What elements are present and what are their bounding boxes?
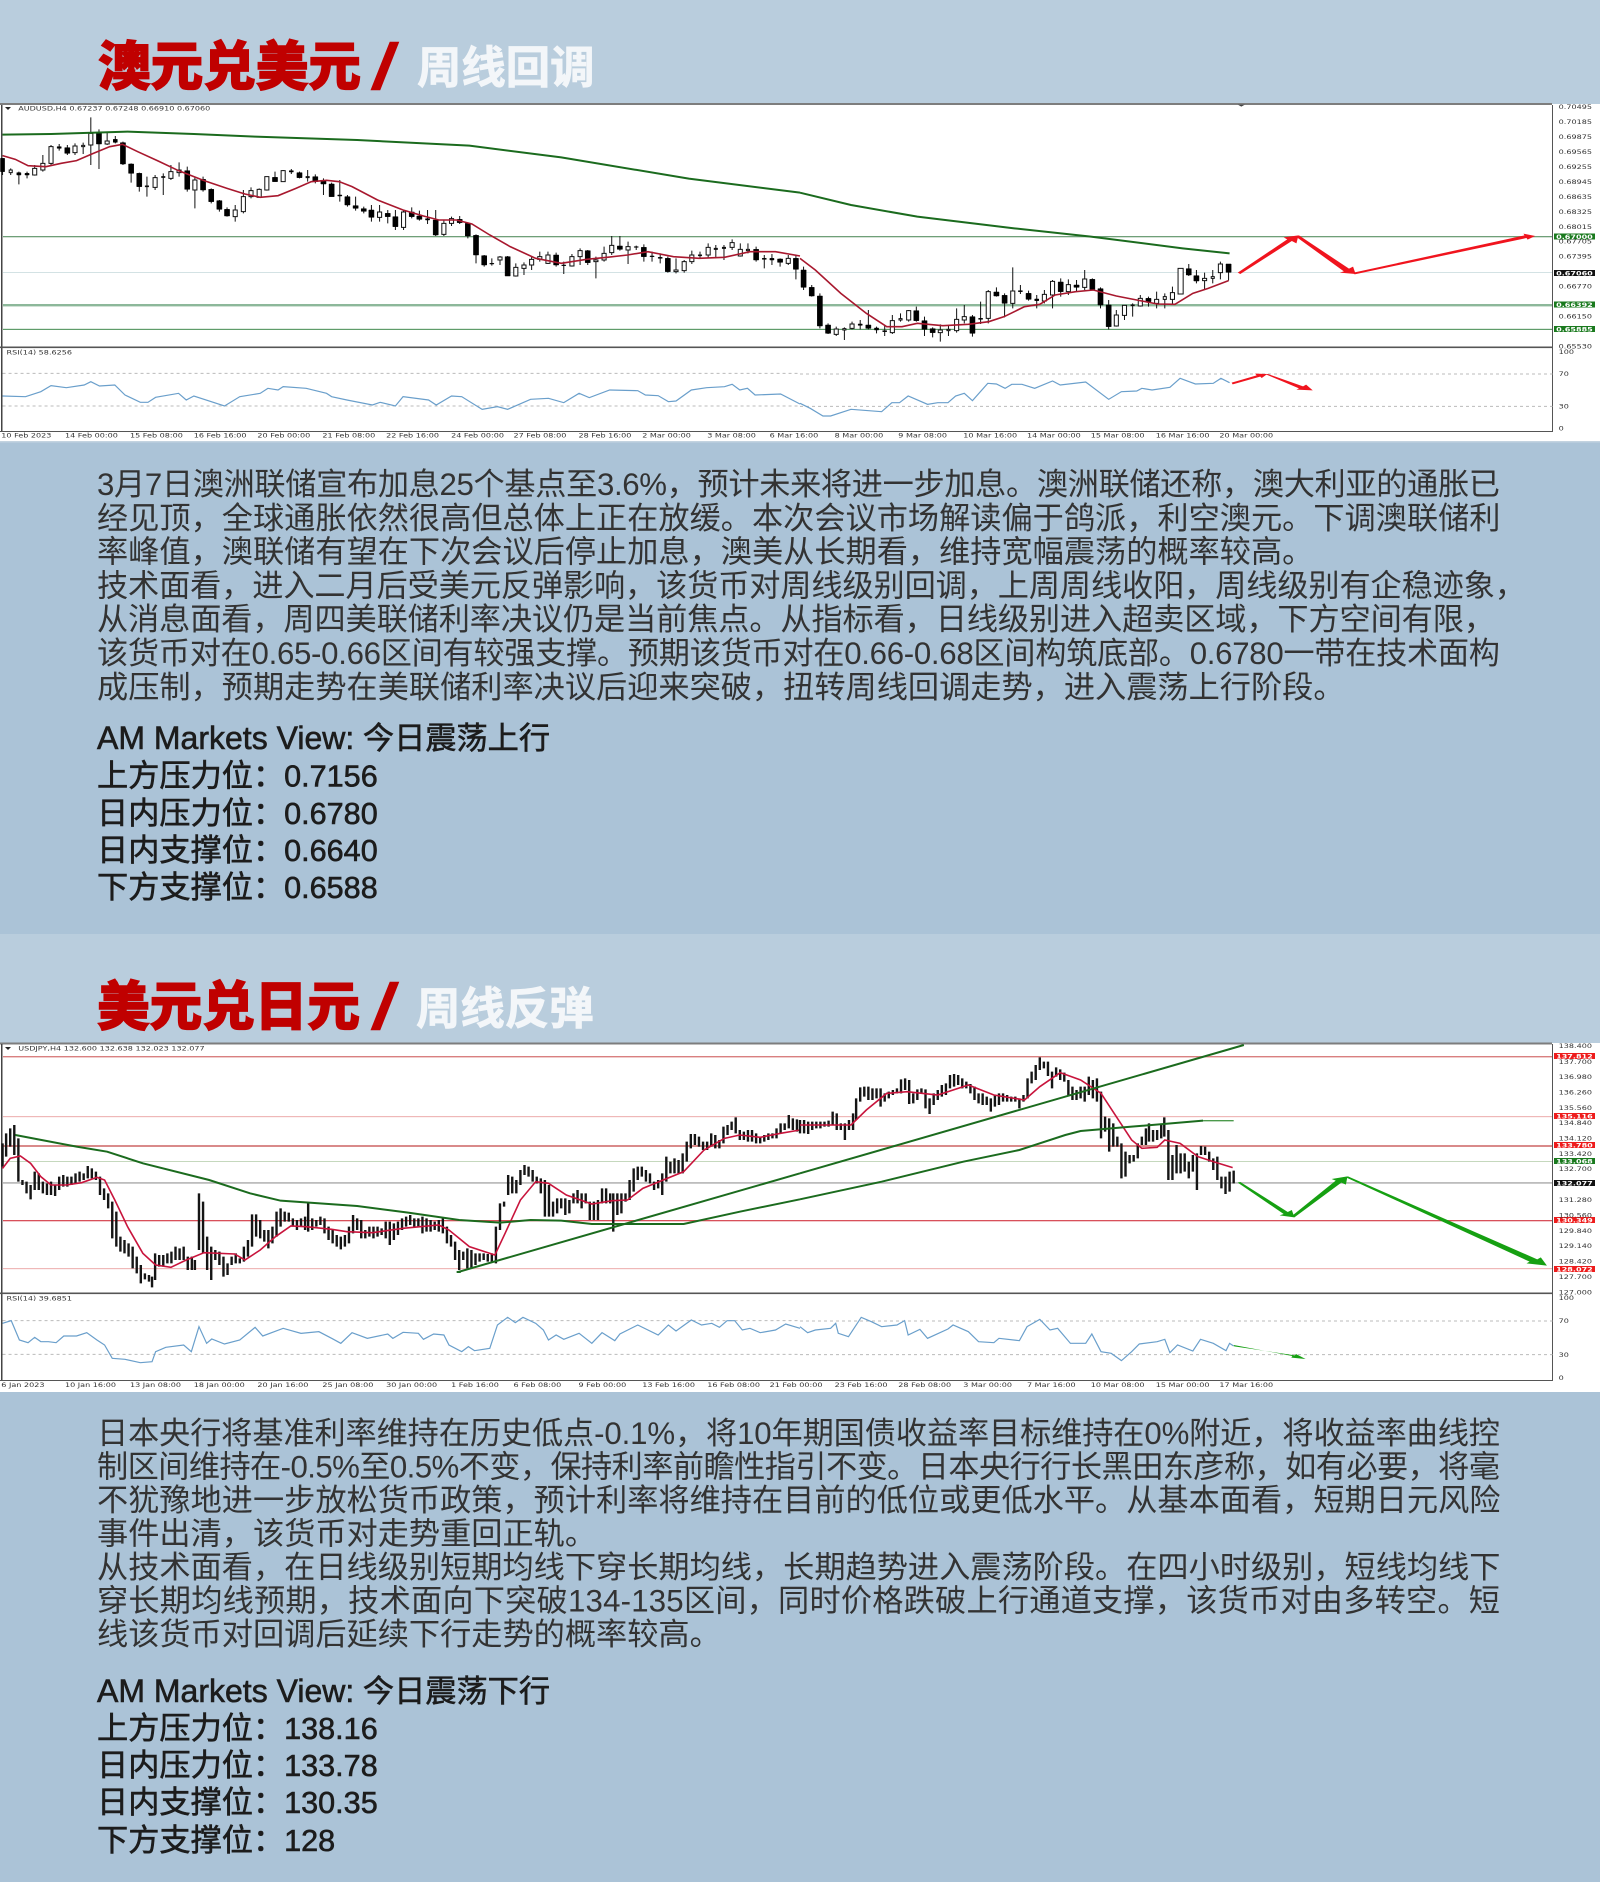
candlesticks left half	[1, 117, 800, 409]
price axis labels: AUDUSD,H4 0.67237 0.67248 0.66910 0.67060	[18, 104, 211, 112]
price axis labels: 0.68325	[1559, 208, 1592, 216]
key levels: USD/JPY: 下方支撑位：128	[97, 1823, 335, 1858]
date axis labels: 20 Mar 00:00	[1219, 431, 1274, 439]
date axis labels: 3 Mar 08:00	[707, 431, 756, 439]
price axis labels: 132.700	[1559, 1165, 1592, 1173]
candlesticks right half	[800, 1045, 1553, 1361]
price axis labels: 134.840	[1559, 1119, 1592, 1127]
header band: USD/JPY	[0, 934, 1600, 1044]
price axis labels: 131.280	[1559, 1196, 1592, 1204]
price axis labels: 70	[1559, 1317, 1569, 1325]
date axis labels: 16 Mar 16:00	[1156, 431, 1210, 439]
text block: AUD/USD analysis: 成压制，预期走势在美联储利率决议后迎来突破，扭转周线回调走势，进入震荡上行阶段。	[97, 670, 1345, 705]
price axis labels: 132.077	[1556, 1179, 1593, 1187]
date axis labels: 22 Feb 16:00	[386, 431, 439, 439]
date axis labels: 30 Jan 00:00	[386, 1381, 438, 1389]
text block: USD/JPY analysis: 日本央行将基准利率维持在历史低点-0.1%，将10年期国债收益率目标维持在0%附近，将收益率曲线控	[97, 1416, 1500, 1451]
price axis labels: 137.700	[1559, 1058, 1592, 1066]
support and resistance lines	[3, 236, 1552, 330]
panel: AUD/USD section	[0, 0, 1600, 934]
date axis labels	[1, 431, 1274, 439]
price axis labels: 0.69255	[1559, 163, 1592, 171]
title: USD/JPY weekly rebound: 美元兑日元	[97, 978, 360, 1037]
price axis labels: 0	[1559, 424, 1564, 432]
key levels: AUD/USD: 日内压力位：0.6780	[97, 796, 378, 831]
date axis labels: 10 Mar 16:00	[963, 431, 1018, 439]
price axis labels: 133.068	[1556, 1157, 1593, 1165]
key levels: AUD/USD: 上方压力位：0.7156	[97, 758, 378, 794]
text block: AUD/USD analysis: 经见顶，全球通胀依然很高但总体上正在放缓。本次会议市场解读偏于鸽派，利空澳元。下调澳联储利	[97, 501, 1500, 536]
text block: AUD/USD analysis: 该货币对在0.65-0.66区间有较强支撑。预期该货币对在0.66-0.68区间构筑底部。0.6780一带在技术面构	[97, 636, 1500, 671]
price axis labels: 0.65885	[1556, 325, 1593, 333]
text block: USD/JPY analysis: 制区间维持在-0.5%至0.5%不变，保持利率前瞻性指引不变。日本央行行长黑田东彦称，如有必要，将毫	[97, 1450, 1500, 1484]
price axis labels	[5, 103, 1595, 432]
text block: AUD/USD analysis	[97, 467, 1526, 705]
title: USD/JPY weekly rebound	[97, 971, 594, 1043]
text block: USD/JPY analysis: 事件出清，该货币对走势重回正轨。	[97, 1516, 596, 1552]
price axis labels: 30	[1559, 402, 1569, 410]
date axis labels: 21 Feb 08:00	[322, 431, 376, 439]
date axis labels: 18 Jan 00:00	[194, 1381, 245, 1389]
date axis labels: 25 Jan 08:00	[322, 1381, 374, 1389]
date axis labels: 15 Mar 08:00	[1091, 431, 1145, 439]
title: AUD/USD weekly pullback: 澳元兑美元	[98, 38, 361, 97]
key levels: USD/JPY: AM Markets View: 今日震荡下行	[97, 1673, 550, 1709]
date axis labels: 3 Mar 00:00	[963, 1381, 1012, 1389]
date axis labels: 23 Feb 16:00	[835, 1381, 888, 1389]
date axis labels: 10 Feb 2023	[1, 431, 51, 439]
chart: AUDUSD H4 candlesticks with RSI	[0, 103, 1600, 442]
price axis labels: 0.67000	[1556, 233, 1593, 241]
price axis labels: 136.980	[1559, 1073, 1592, 1081]
date axis labels: 13 Jan 08:00	[130, 1381, 181, 1389]
date axis labels: 2 Mar 00:00	[642, 431, 691, 439]
text block: USD/JPY analysis: 从技术面看，在日线级别短期均线下穿长期均线，长期趋势进入震荡阶段。在四小时级别，短线均线下	[97, 1550, 1500, 1585]
price axis labels: 0.67060	[1556, 269, 1593, 277]
candlesticks right half	[800, 105, 1553, 416]
price axis labels: RSI(14) 39.6851	[6, 1294, 72, 1302]
price axis labels: 0.68015	[1559, 223, 1592, 231]
price axis labels: 127.700	[1559, 1273, 1592, 1281]
date axis labels: 15 Feb 08:00	[130, 431, 183, 439]
title: AUD/USD weekly pullback: 周线回调	[417, 44, 595, 93]
date axis labels: 7 Mar 16:00	[1027, 1381, 1076, 1389]
price axis labels: 0.70495	[1559, 103, 1592, 111]
support and resistance lines	[3, 1056, 1552, 1269]
price axis labels: 134.120	[1559, 1134, 1592, 1142]
date axis labels: 16 Feb 16:00	[194, 431, 247, 439]
key levels: USD/JPY: 日内压力位：133.78	[97, 1748, 378, 1783]
price axis labels: 0.70185	[1559, 118, 1592, 126]
date axis labels: 6 Mar 16:00	[770, 431, 819, 439]
forecast arrows: green	[1234, 1176, 1547, 1359]
price axis labels: 135.560	[1559, 1104, 1592, 1112]
date axis labels: 9 Feb 00:00	[579, 1381, 627, 1389]
key levels: AUD/USD	[97, 720, 550, 905]
price axis labels: 129.840	[1559, 1227, 1592, 1235]
forecast arrows: red	[1232, 234, 1535, 390]
date axis labels: 27 Feb 08:00	[513, 431, 567, 439]
date axis labels: 6 Feb 08:00	[513, 1381, 562, 1389]
price axis labels: 0.69565	[1559, 148, 1592, 156]
price axis labels: 133.420	[1559, 1150, 1592, 1158]
header band: AUD/USD	[0, 0, 1600, 105]
price axis labels: 0.65530	[1559, 342, 1592, 350]
key levels: AUD/USD: 下方支撑位：0.6588	[97, 870, 378, 905]
date axis labels: 14 Feb 00:00	[65, 431, 118, 439]
text block: AUD/USD analysis: 技术面看，进入二月后受美元反弹影响，该货币对周线级别回调，上周周线收阳，周线级别有企稳迹象，	[97, 568, 1526, 603]
date axis labels: 17 Mar 16:00	[1219, 1381, 1274, 1389]
price axis labels: 138.400	[1559, 1042, 1592, 1050]
price axis labels: 128.420	[1559, 1257, 1592, 1265]
price axis labels: 135.116	[1556, 1112, 1593, 1120]
date axis labels: 28 Feb 16:00	[579, 431, 632, 439]
price axis labels: 0.69875	[1559, 133, 1592, 141]
key levels: USD/JPY: 日内支撑位：130.35	[97, 1785, 378, 1820]
price axis labels: 0.66392	[1556, 301, 1593, 309]
price axis labels: 30	[1559, 1351, 1569, 1359]
date axis labels: 13 Feb 16:00	[642, 1381, 696, 1389]
price axis labels: 136.260	[1559, 1088, 1592, 1096]
title: USD/JPY weekly rebound: /	[372, 971, 399, 1043]
price axis labels: 0.67705	[1559, 237, 1592, 245]
date axis labels: 6 Jan 2023	[1, 1381, 44, 1389]
text block: USD/JPY analysis: 线该货币对回调后延续下行走势的概率较高。	[97, 1617, 721, 1652]
panel: USD/JPY section	[0, 934, 1600, 1882]
date axis labels: 10 Jan 16:00	[65, 1381, 116, 1389]
candlesticks left half	[3, 1115, 800, 1363]
key levels: AUD/USD: AM Markets View: 今日震荡上行	[97, 720, 550, 756]
date axis labels	[1, 1381, 1274, 1389]
price axis labels: 127.000	[1559, 1288, 1592, 1296]
date axis labels: 1 Feb 16:00	[451, 1381, 499, 1389]
price axis labels: 0.66150	[1559, 312, 1592, 320]
text block: AUD/USD analysis: 率峰值，澳联储有望在下次会议后停止加息，澳美从长期看，维持宽幅震荡的概率较高。	[97, 535, 1313, 570]
price axis labels: 130.560	[1559, 1211, 1592, 1219]
price axis labels	[5, 1042, 1595, 1382]
price axis labels: 0.66770	[1559, 282, 1592, 290]
price axis labels: 128.072	[1556, 1265, 1593, 1273]
chart: USDJPY H4 candlesticks with RSI	[0, 1042, 1600, 1392]
text block: USD/JPY analysis: 不犹豫地进一步放松货币政策，预计利率将维持在目前的低位或更低水平。从基本面看，短期日元风险	[97, 1483, 1500, 1518]
price axis labels: 0.68635	[1559, 193, 1592, 201]
date axis labels: 15 Mar 00:00	[1156, 1381, 1210, 1389]
date axis labels: 16 Feb 08:00	[707, 1381, 761, 1389]
price axis labels: USDJPY,H4 132.600 132.638 132.023 132.077	[18, 1044, 205, 1052]
price axis labels: 100	[1559, 1294, 1575, 1302]
date axis labels: 9 Mar 08:00	[898, 431, 947, 439]
price axis labels: 100	[1559, 348, 1575, 356]
title: AUD/USD weekly pullback: /	[372, 31, 399, 103]
price axis labels: 70	[1559, 370, 1569, 378]
key levels: AUD/USD: 日内支撑位：0.6640	[97, 833, 378, 868]
price axis labels: 0	[1559, 1374, 1564, 1382]
key levels: USD/JPY: 上方压力位：138.16	[97, 1711, 378, 1746]
price axis labels: 137.812	[1556, 1052, 1593, 1060]
date axis labels: 21 Feb 00:00	[770, 1381, 823, 1389]
price axis labels: 0.67395	[1559, 252, 1592, 260]
date axis labels: 10 Mar 08:00	[1091, 1381, 1145, 1389]
text block: USD/JPY analysis	[97, 1416, 1500, 1652]
key levels: USD/JPY	[97, 1673, 550, 1858]
title: AUD/USD weekly pullback	[98, 31, 595, 103]
price axis labels: 133.780	[1556, 1141, 1593, 1149]
date axis labels: 8 Mar 00:00	[835, 431, 884, 439]
price axis labels: 130.349	[1556, 1216, 1593, 1224]
price axis labels: RSI(14) 58.6256	[6, 348, 72, 356]
price axis labels: 129.140	[1559, 1242, 1592, 1250]
price axis labels: 0.68945	[1559, 178, 1592, 186]
text block: AUD/USD analysis: 3月7日澳洲联储宣布加息25个基点至3.6%，预计未来将进一步加息。澳洲联储还称，澳大利亚的通胀已	[97, 467, 1500, 502]
date axis labels: 24 Feb 00:00	[451, 431, 504, 439]
date axis labels: 28 Feb 08:00	[898, 1381, 952, 1389]
text block: USD/JPY analysis: 穿长期均线预期，技术面向下突破134-135区间，同时价格跌破上行通道支撑，该货币对由多转空。短	[97, 1584, 1500, 1618]
text block: AUD/USD analysis: 从消息面看，周四美联储利率决议仍是当前焦点。从指标看，日线级别进入超卖区域，下方空间有限，	[97, 602, 1495, 637]
date axis labels: 14 Mar 00:00	[1027, 431, 1081, 439]
date axis labels: 20 Jan 16:00	[257, 1381, 309, 1389]
title: USD/JPY weekly rebound: 周线反弹	[416, 985, 594, 1034]
date axis labels: 20 Feb 00:00	[257, 431, 311, 439]
